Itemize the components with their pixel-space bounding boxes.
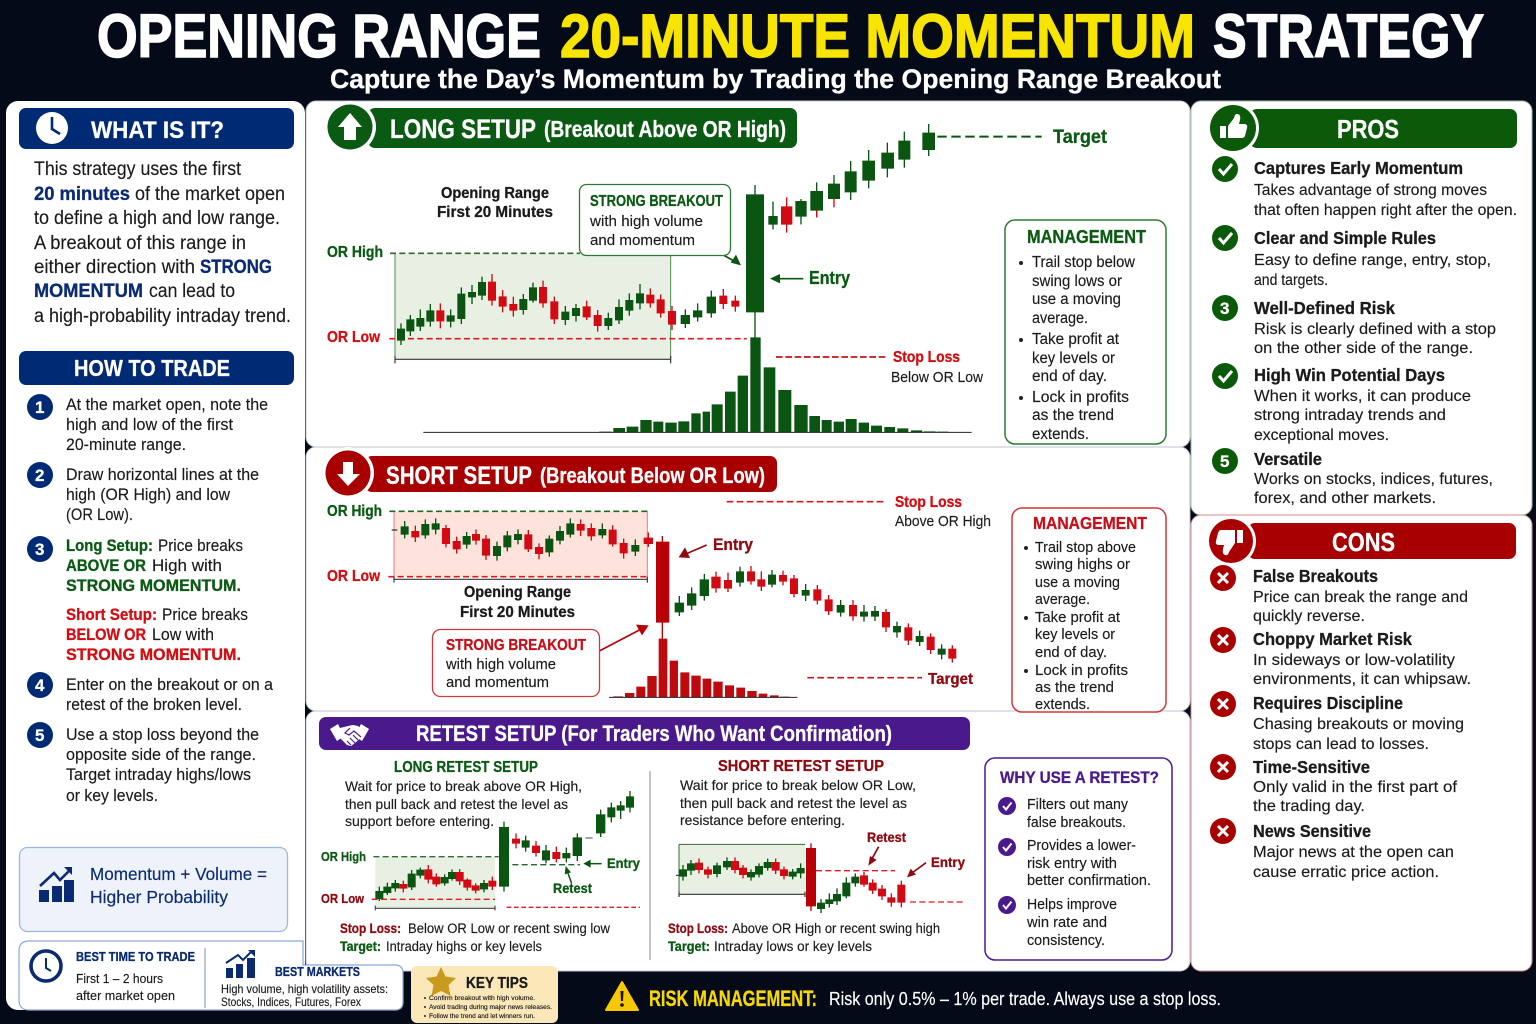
pros item 3: Well-Defined Risk [1254,298,1395,318]
cons item 1: Price can break the range and [1253,589,1468,606]
chart labels: long setup: First 20 Minutes [437,204,553,221]
text block: definition [34,159,291,327]
callout: strong breakout long: STRONG BREAKOUT [590,193,723,210]
text block: short retest: then pull back and retest the level as [680,795,907,811]
pros item 1: Captures Early Momentum [1254,158,1463,178]
callout: momentum plus volume: Higher Probability [90,887,228,907]
callout: momentum plus volume: Momentum + Volume = [90,864,267,884]
text block: long retest: support before entering. [345,813,494,829]
chart labels: short retest: Entry [931,854,965,870]
steps list: Long Setup: [66,537,153,555]
heading: pros: PROS [1337,114,1399,144]
cons item 2: Choppy Market Risk [1253,629,1412,649]
pros item 4: High Win Potential Days [1254,365,1445,385]
callout: strong breakout short: with high volume [445,656,556,673]
cons item 4: Only valid in the first part of [1253,779,1458,796]
panel: why use a retest: Filters out many [1027,797,1129,813]
icon: clock [31,951,61,981]
panel: key tips: KEY TIPS [466,975,528,992]
heading: short setup: SHORT SETUP [386,462,532,490]
chart labels: long setup: Opening Range [441,185,549,202]
steps list: Enter on the breakout or on a [66,676,274,694]
chart labels: long retest: Retest [553,880,592,896]
chart labels: long setup: Stop Loss [893,349,960,366]
text block: short retest stop and target: Above OR High or recent swing high [732,921,940,936]
chart labels: short setup [327,494,991,688]
steps list: high and low of the first [66,416,233,434]
pros item 2 [1212,225,1491,289]
title: OPENING RANGE [97,2,541,70]
cons item 2: environments, it can whipsaw. [1253,671,1471,688]
steps list: (OR Low). [66,506,133,524]
pros item 5: forex, and other markets. [1254,490,1436,507]
best markets text: BEST MARKETS [275,964,360,979]
icon: handshake [330,724,369,746]
steps list: 5 [35,726,44,745]
cons item 5 [1210,818,1454,881]
risk management banner: RISK MANAGEMENT: [649,986,817,1011]
chart labels: long setup: Entry [809,268,850,288]
heading: long setup [324,101,797,153]
panel: short management: swing highs or [1035,556,1130,573]
panel: key tips: Avoid trading during major news releases. [429,1004,552,1011]
heading: cons [1206,516,1516,566]
cons item 1: False Breakouts [1253,566,1378,586]
text block: long retest stop and target: Target: [340,939,381,954]
text block: long retest stop and target [340,921,610,954]
cons item 4: the trading day. [1253,798,1365,815]
panel: short management: Take profit at [1035,609,1121,626]
pros item 4: When it works, it can produce [1254,388,1471,405]
pros item 3 [1212,295,1496,357]
panel: long management: Take profit at [1032,331,1120,348]
panel: why use a retest: WHY USE A RETEST? [1000,768,1159,787]
cons item 2: In sideways or low-volatility [1253,652,1455,669]
panel: why use a retest: Helps improve [1027,897,1117,913]
chart labels: short setup: Above OR High [895,514,991,530]
chart labels: long setup: Below OR Low [891,369,983,386]
chart labels: long retest: OR High [321,849,366,864]
cons item 3: Chasing breakouts or moving [1253,716,1464,733]
steps list: Use a stop loss beyond the [66,726,259,744]
panel: key tips: Follow the trend and let winners run. [429,1013,535,1020]
steps list: STRONG MOMENTUM. [66,646,241,664]
heading: short setup: (Breakout Below OR Low) [540,463,765,488]
chart labels: short setup: Target [928,671,974,688]
chart labels: short setup: OR Low [327,568,380,585]
cons item 2 [1210,627,1471,688]
pros item 3: on the other side of the range. [1254,340,1473,357]
pros item 3: Risk is clearly defined with a stop [1254,321,1496,338]
steps list: ABOVE OR [66,557,146,575]
cons item 1 [1210,565,1468,625]
text block: long retest stop and target: Intraday highs or key levels [386,939,542,954]
heading: what is it [19,108,294,149]
heading: what is it: WHAT IS IT? [91,117,224,144]
heading: retest setup [319,717,970,750]
text block: short retest [680,758,916,828]
pros item 1: that often happen right after the open. [1254,202,1517,219]
panel: short management: MANAGEMENT [1033,513,1147,533]
steps list: High with [152,557,222,575]
pros item 5: Works on stocks, indices, futures, [1254,471,1493,488]
heading: long setup: LONG SETUP [390,114,536,144]
text block: definition: either direction with [34,257,195,278]
chart labels: long setup: OR Low [327,329,380,346]
steps list: retest of the broken level. [66,696,242,714]
cons item 3: Requires Discipline [1253,693,1403,713]
steps list: Short Setup: [66,606,157,624]
panel: long management: key levels or [1032,350,1115,367]
text block: short retest: Wait for price to break below OR Low, [680,777,916,793]
steps list: Price breaks [158,537,243,555]
panel: best time and best markets [19,941,403,1010]
panel: why use a retest [985,758,1172,960]
steps list: high (OR High) and low [66,486,230,504]
text block: short retest stop and target: Target: [668,939,710,954]
text block: long retest: then pull back and retest the level as [345,796,568,812]
text block: definition: a high-probability intraday trend. [34,306,291,327]
panel: long management: swing lows or [1032,273,1122,290]
panel: retest setup [306,711,1190,971]
cons item 3 [1210,691,1464,753]
panel: left column [6,101,305,1010]
steps list: 20-minute range. [66,436,186,454]
text block: definition: to define a high and low range. [34,208,280,229]
panel: short management: average. [1035,591,1090,608]
pros item 3: 3 [1220,299,1229,318]
text block: definition: 20 minutes [34,184,130,205]
cons item 4 [1210,754,1458,815]
heading: cons: CONS [1332,527,1395,557]
panel: short management: key levels or [1035,626,1115,643]
text block: definition: MOMENTUM [34,281,143,302]
cons item 5: cause erratic price action. [1253,864,1439,881]
text block: short retest stop and target: Stop Loss: [668,921,728,936]
panel: long management: end of day. [1032,368,1107,385]
panel: why use a retest: Provides a lower- [1027,838,1136,854]
panel: key tips [411,966,558,1023]
chart: long retest [372,791,640,910]
steps list: or key levels. [66,787,158,805]
pros item 1: Takes advantage of strong moves [1254,182,1487,199]
panel: short management: as the trend [1035,679,1114,696]
callout: strong breakout short: and momentum [446,674,549,691]
heading: short setup [322,447,777,499]
steps list: 2 [35,466,44,485]
steps list: Price breaks [162,606,248,624]
chart labels: long retest: Entry [607,855,640,871]
pros item 1 [1212,156,1517,219]
callout: strong breakout long: and momentum [590,232,695,249]
chart labels: short setup: Stop Loss [895,494,962,511]
chart labels: long retest: OR Low [321,891,365,906]
panel: why use a retest: consistency. [1027,933,1105,949]
panel: cons [1191,515,1532,971]
text block: short retest: SHORT RETEST SETUP [718,758,884,775]
panel: long management: as the trend [1032,407,1114,424]
text block: definition: This strategy uses the first [34,159,242,180]
text block: short retest stop and target [668,921,940,954]
pros item 4: exceptional moves. [1254,427,1389,444]
panel: long management: Lock in profits [1032,389,1129,406]
heading: how to trade [19,351,294,385]
chart labels: short setup: Entry [713,535,753,554]
chart: long setup [389,124,1042,432]
risk management banner [606,982,1221,1011]
chart labels: short retest: Retest [867,829,906,845]
panel: long management: extends. [1032,426,1089,443]
steps list: 4 [35,676,45,695]
chart labels: short setup: Opening Range [464,584,571,601]
panel: long management: average. [1032,310,1088,327]
text block: long retest stop and target: Below OR Low or recent swing low [408,921,610,936]
heading: how to trade: HOW TO TRADE [74,355,230,381]
panel: long management [1005,220,1166,444]
text block: definition: STRONG [200,257,272,278]
callout: strong breakout long [580,184,730,256]
callout: momentum plus volume [20,848,288,932]
callout: strong breakout short: STRONG BREAKOUT [446,637,586,654]
pros item 2: Clear and Simple Rules [1254,228,1436,248]
steps list: STRONG MOMENTUM. [66,577,241,595]
best time text [76,949,195,1003]
best time text: BEST TIME TO TRADE [76,949,195,964]
cons item 3: stops can lead to losses. [1253,736,1429,753]
chart labels: long setup: Target [1053,127,1108,148]
title: STRATEGY [1213,2,1484,70]
chart labels: short retest [867,829,965,870]
best time text: after market open [76,988,175,1003]
subtitle: Capture the Day’s Momentum by Trading the Opening Range Breakout [330,64,1221,94]
panel: long management: use a moving [1032,291,1121,308]
pros item 5 [1212,448,1493,507]
panel: short management: Trail stop above [1035,539,1136,556]
text block: definition: can lead to [149,281,235,302]
pros item 2: and targets. [1254,272,1328,289]
volume bars [613,639,789,697]
heading: pros [1207,102,1517,154]
best markets text: Stocks, Indices, Futures, Forex [221,995,361,1009]
panel: short management: use a moving [1035,574,1120,591]
panel: long setup [306,101,1190,447]
pros item 5: 5 [1220,452,1229,471]
title: 20-MINUTE MOMENTUM [560,2,1195,70]
chart labels: long setup: OR High [327,244,383,261]
text block: long retest stop and target: Stop Loss: [340,921,401,936]
cons item 4: Time-Sensitive [1253,757,1370,777]
best markets text [221,964,388,1009]
panel: long management: MANAGEMENT [1027,227,1146,247]
chart labels: short setup: OR High [327,503,382,520]
panel: short management: extends. [1035,696,1090,713]
pros item 5: Versatile [1254,449,1322,469]
steps list: 3 [35,540,44,559]
panel: why use a retest: win rate and [1026,915,1107,931]
title [97,2,1484,70]
cons item 5: News Sensitive [1253,821,1371,841]
steps list [27,394,274,805]
panel: key tips: Confirm breakout with high volume. [429,995,535,1002]
steps list: BELOW OR [66,626,146,644]
panel: why use a retest: risk entry with [1027,856,1117,872]
pros item 4 [1212,363,1471,444]
callout: strong breakout long: with high volume [589,213,703,230]
best markets text: High volume, high volatility assets: [221,982,388,996]
steps list: Draw horizontal lines at the [66,466,259,484]
steps list: Low with [152,626,214,644]
cons item 1: quickly reverse. [1253,608,1365,625]
heading: retest setup: RETEST SETUP (For Traders Who Want Confirmation) [416,721,892,746]
best time text: First 1 – 2 hours [76,971,163,986]
panel: short management: end of day. [1035,644,1107,661]
chart labels: short setup: First 20 Minutes [460,604,575,621]
icon: rising bars [226,950,255,978]
text block: short retest: resistance before entering. [680,812,845,828]
risk management banner: Risk only 0.5% – 1% per trade. Always use a stop loss. [829,989,1221,1009]
text block: long retest [345,759,582,829]
text block: long retest: LONG RETEST SETUP [394,759,538,776]
panel: short setup [306,447,1190,711]
panel: long management: Trail stop below [1032,254,1136,271]
panel: why use a retest: better confirmation. [1027,873,1151,889]
pros item 2: Easy to define range, entry, stop, [1254,252,1491,269]
heading: long setup: (Breakout Above OR High) [544,116,786,142]
steps list: Target intraday highs/lows [66,766,251,784]
chart labels: long setup [327,127,1108,386]
text block: short retest stop and target: Intraday lows or key levels [714,939,872,954]
panel: short management [1012,508,1166,713]
steps list: At the market open, note the [66,396,268,414]
chart labels: long retest [321,849,640,906]
chart: short retest [676,843,963,913]
text block: definition: A breakout of this range in [34,233,246,254]
text block: definition: of the market open [135,184,285,205]
volume bars [599,337,963,432]
panel: pros [1191,101,1532,515]
chart: short setup [388,502,956,697]
steps list: 1 [35,398,44,417]
text block: long retest: Wait for price to break above OR High, [345,778,582,794]
callout: strong breakout short [432,630,600,696]
cons item 5: Major news at the open can [1253,844,1454,861]
panel: why use a retest: false breakouts. [1027,815,1126,831]
panel: short management: Lock in profits [1035,662,1128,679]
pros item 4: strong intraday trends and [1254,407,1446,424]
steps list: opposite side of the range. [66,746,256,764]
